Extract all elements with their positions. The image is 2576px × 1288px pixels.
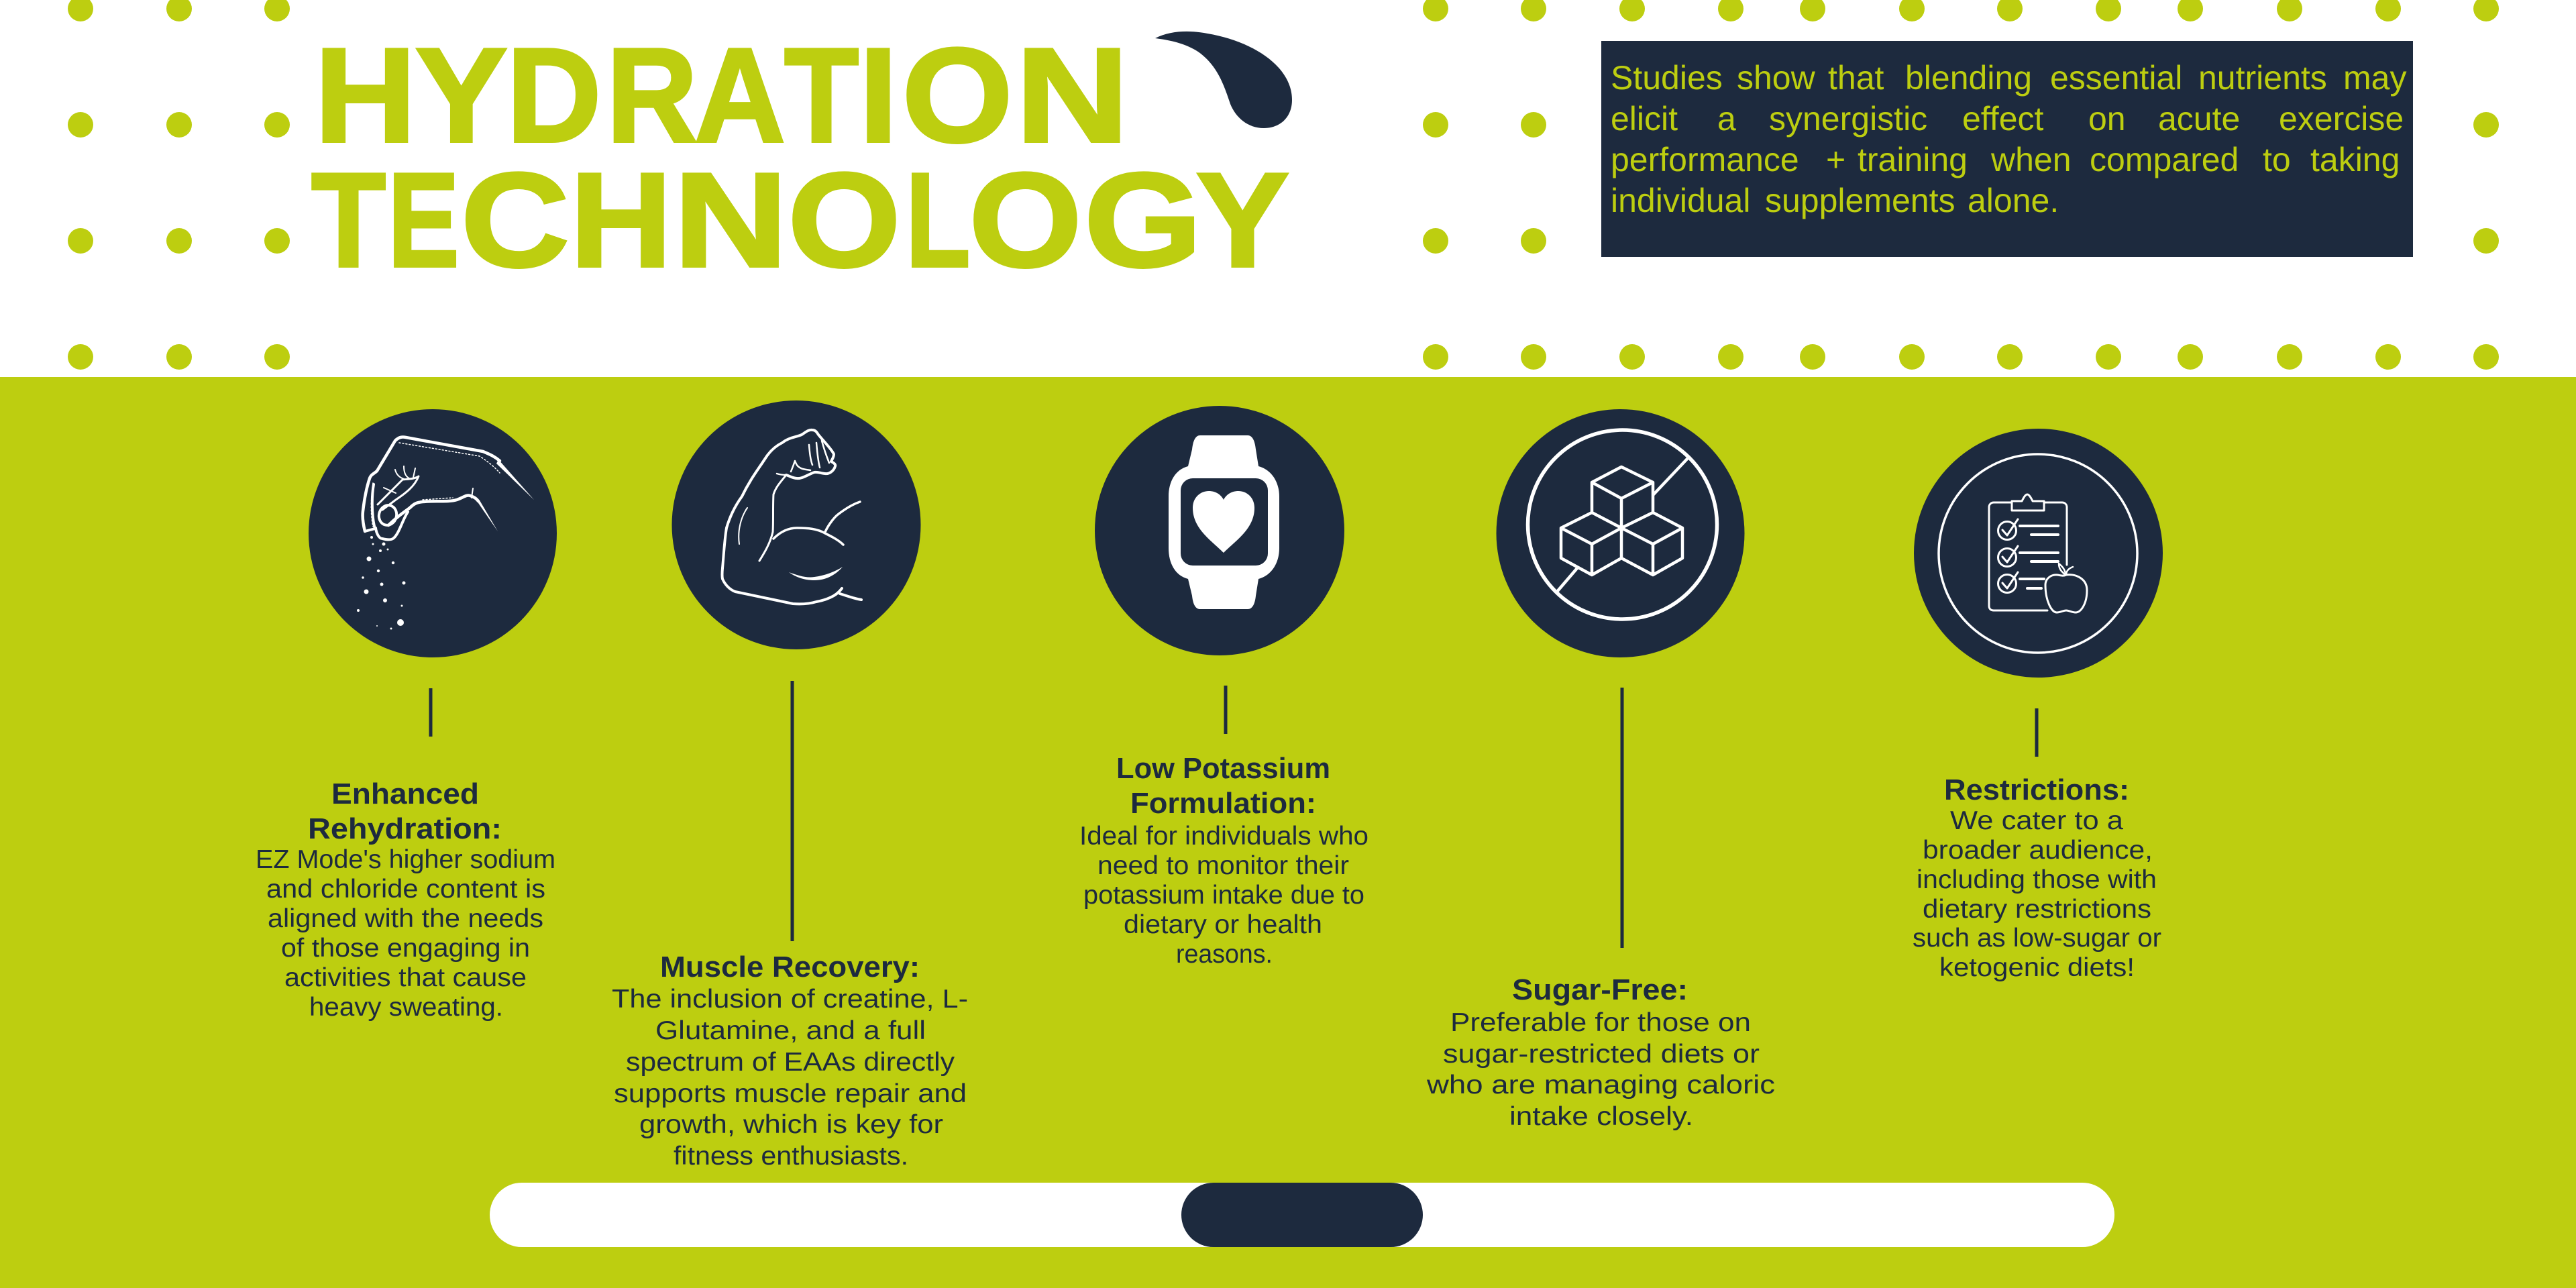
title: N — [1016, 21, 1129, 170]
text block: Low Potassium Formulation: need to monitor their — [1097, 851, 1349, 880]
icon: water drop — [1155, 32, 1292, 128]
text block: Restrictions: such as low-sugar or — [1913, 924, 2161, 953]
title: R — [606, 21, 698, 170]
callout text: a — [1717, 100, 1736, 138]
text block: Enhanced Rehydration: of those engaging in — [281, 934, 530, 963]
heart — [1193, 491, 1254, 553]
title — [311, 20, 1289, 295]
text block: Low Potassium Formulation: potassium intake due to — [1083, 881, 1364, 910]
title: T — [784, 20, 859, 170]
callout text: show — [1737, 59, 1816, 97]
progress bar thumb — [1181, 1183, 1423, 1247]
text block: Muscle Recovery — [612, 951, 968, 1171]
text block: Enhanced Rehydration: Rehydration: — [308, 812, 502, 845]
text block: Enhanced Rehydration: aligned with the needs — [268, 904, 543, 933]
text block: Muscle Recovery: growth, which is key for — [639, 1110, 943, 1139]
icon: flexed arm — [672, 400, 920, 649]
text block: Low Potassium Formulation — [1079, 752, 1368, 969]
title: O — [902, 20, 1013, 170]
title: E — [388, 146, 460, 295]
icon: smartwatch with heart — [1095, 406, 1344, 655]
text block: Enhanced Rehydration: and chloride content is — [266, 875, 545, 904]
callout text: elicit — [1611, 100, 1678, 138]
callout text: essential — [2050, 59, 2182, 97]
callout text — [1611, 59, 2406, 219]
text block: Sugar-Free: intake closely. — [1509, 1102, 1693, 1131]
callout text: when — [1990, 141, 2072, 178]
callout text: taking — [2310, 141, 2400, 178]
callout text: alone. — [1968, 182, 2059, 219]
text block: Low Potassium Formulation: Formulation: — [1130, 787, 1316, 820]
text block: Restrictions — [1913, 773, 2161, 982]
text block: Muscle Recovery: Glutamine, and a full — [655, 1016, 926, 1045]
text block: Sugar-Free: Preferable for those on — [1450, 1008, 1751, 1037]
text block: Restrictions: including those with — [1917, 865, 2157, 894]
callout text: blending — [1905, 59, 2032, 97]
callout text: compared — [2090, 141, 2239, 178]
callout text: to — [2263, 141, 2291, 178]
icon: no sugar cubes — [1496, 409, 1744, 657]
title: T — [311, 145, 386, 295]
callout text: performance — [1611, 141, 1799, 178]
text block: Restrictions: dietary restrictions — [1923, 895, 2151, 924]
text block: Enhanced Rehydration: Enhanced — [331, 777, 479, 810]
text block: Low Potassium Formulation: Low Potassium — [1116, 752, 1330, 785]
title: A — [694, 21, 786, 170]
callout text: synergistic — [1769, 100, 1927, 138]
text block: Muscle Recovery: supports muscle repair and — [614, 1079, 967, 1108]
title: H — [315, 21, 416, 170]
title: O — [969, 146, 1082, 295]
text block: Restrictions: Restrictions: — [1944, 773, 2129, 806]
callout text: nutrients — [2198, 59, 2327, 97]
text block: Enhanced Rehydration: heavy sweating. — [309, 993, 503, 1022]
progress bar — [490, 1183, 2114, 1247]
text block: Enhanced Rehydration: activities that cause — [284, 963, 527, 992]
text block: Restrictions: ketogenic diets! — [1939, 953, 2135, 982]
callout text: effect — [1962, 100, 2043, 138]
text block: Restrictions: broader audience, — [1923, 836, 2153, 865]
connector lines — [429, 681, 2038, 948]
text block: Sugar-Free: who are managing caloric — [1426, 1071, 1775, 1099]
text block: Sugar-Free: sugar-restricted diets or — [1443, 1040, 1760, 1069]
text block: Enhanced Rehydration: EZ Mode's higher sodium — [256, 845, 555, 874]
title: G — [1084, 146, 1202, 295]
icon: checklist with apple — [1914, 429, 2163, 678]
callout text: may — [2343, 59, 2406, 97]
title: Y — [1196, 146, 1289, 295]
callout text: + — [1826, 141, 1845, 178]
title: N — [674, 146, 788, 295]
text block: Restrictions: We cater to a — [1950, 806, 2123, 835]
text block: Muscle Recovery: The inclusion of creatine, L- — [612, 985, 968, 1014]
text block: Muscle Recovery: Muscle Recovery: — [660, 951, 920, 983]
text block: Muscle Recovery: spectrum of EAAs directly — [626, 1048, 955, 1077]
callout text: training — [1858, 141, 1968, 178]
callout text: on — [2088, 100, 2126, 138]
callout text: Studies — [1611, 59, 1723, 97]
title: C — [461, 145, 570, 294]
text block: Sugar-Free — [1426, 973, 1775, 1131]
text block: Low Potassium Formulation: dietary or health — [1124, 910, 1322, 939]
panel: studies callout — [1601, 41, 2413, 257]
callout text: individual — [1611, 182, 1750, 219]
green background panel — [0, 377, 2576, 1288]
callout text: that — [1828, 59, 1884, 97]
icon: hand sprinkling salt — [309, 409, 557, 657]
text block: Sugar-Free: Sugar-Free: — [1512, 973, 1688, 1006]
text block: Low Potassium Formulation: Ideal for individuals who — [1079, 822, 1368, 851]
title: Y — [415, 21, 507, 170]
title: I — [859, 21, 898, 170]
text block: Muscle Recovery: fitness enthusiasts. — [674, 1142, 908, 1171]
title: L — [906, 146, 971, 295]
callout text: supplements — [1765, 182, 1955, 219]
callout text: exercise — [2279, 100, 2404, 138]
callout text: acute — [2158, 100, 2240, 138]
title: D — [506, 20, 602, 170]
text block: Enhanced Rehydration — [256, 777, 555, 1022]
title: H — [570, 146, 672, 295]
text block: Low Potassium Formulation: reasons. — [1176, 940, 1273, 969]
title: O — [788, 146, 901, 295]
